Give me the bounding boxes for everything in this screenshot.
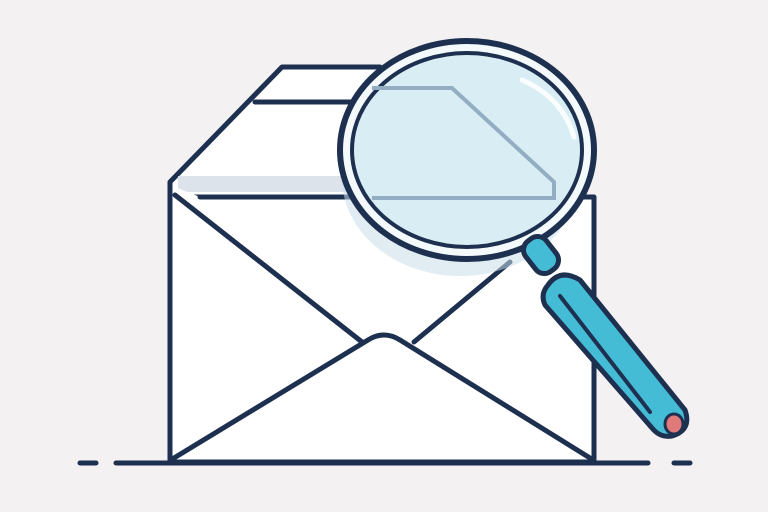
magnifier (340, 41, 687, 436)
back flap (170, 67, 380, 197)
envelope (170, 67, 594, 462)
handle (519, 232, 687, 436)
top V lines (175, 195, 510, 342)
baseline (80, 460, 690, 466)
bottom flap (174, 335, 590, 458)
envelope body (170, 185, 594, 462)
lens (340, 41, 594, 259)
